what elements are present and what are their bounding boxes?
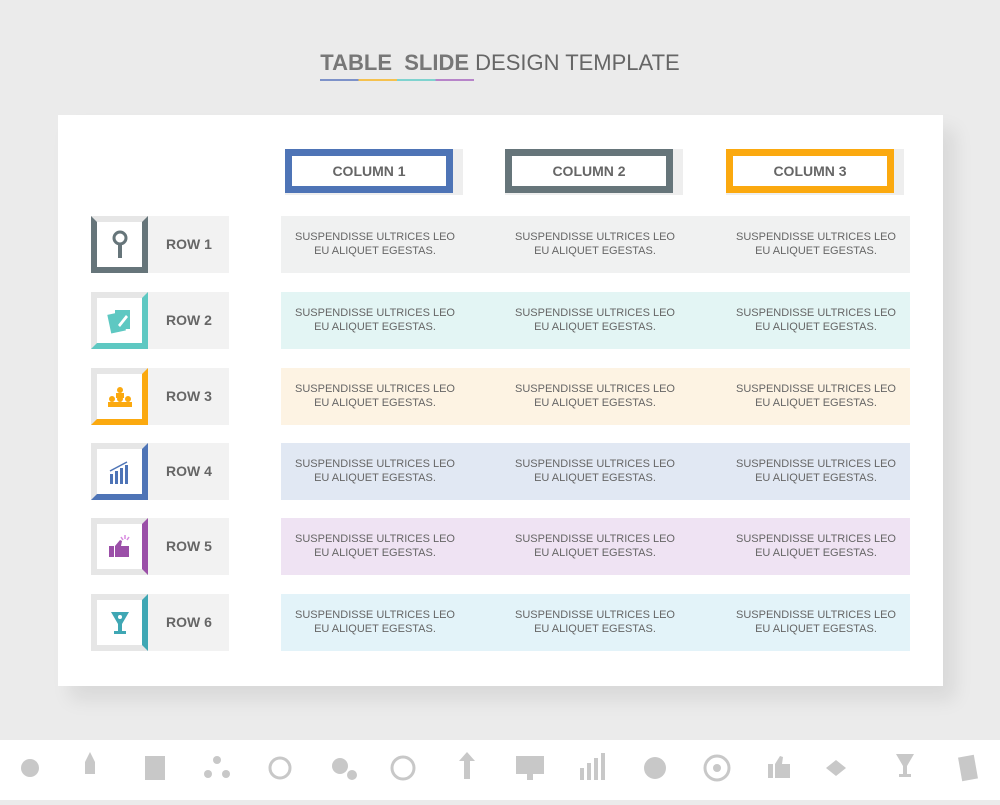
row 4: EU ALIQUET EGESTAS. xyxy=(534,472,656,484)
row 2: SUSPENDISSE ULTRICES LEO xyxy=(515,307,675,319)
row 5 xyxy=(91,518,910,575)
column header 3 xyxy=(726,149,904,195)
column header 2 xyxy=(505,149,683,195)
row 2: ROW 2 xyxy=(166,312,212,328)
column header 3: COLUMN 3 xyxy=(773,163,847,179)
row 5: EU ALIQUET EGESTAS. xyxy=(755,547,877,559)
panel: table xyxy=(58,115,943,686)
row 5: EU ALIQUET EGESTAS. xyxy=(534,547,656,559)
row 3: SUSPENDISSE ULTRICES LEO xyxy=(736,383,896,395)
row 6: EU ALIQUET EGESTAS. xyxy=(755,623,877,635)
row 6 xyxy=(91,594,910,651)
row 5: ROW 5 xyxy=(166,538,212,554)
row 3: EU ALIQUET EGESTAS. xyxy=(755,397,877,409)
row 6: EU ALIQUET EGESTAS. xyxy=(534,623,656,635)
row 4: SUSPENDISSE ULTRICES LEO xyxy=(736,458,896,470)
row 4 xyxy=(91,443,910,500)
row 5: EU ALIQUET EGESTAS. xyxy=(314,547,436,559)
row 1: SUSPENDISSE ULTRICES LEO xyxy=(295,231,455,243)
row 1: SUSPENDISSE ULTRICES LEO xyxy=(515,231,675,243)
row 3: EU ALIQUET EGESTAS. xyxy=(314,397,436,409)
row 1: EU ALIQUET EGESTAS. xyxy=(314,245,436,257)
icon: key xyxy=(91,216,148,273)
row 1 xyxy=(91,216,910,273)
row 2: EU ALIQUET EGESTAS. xyxy=(534,321,656,333)
row 5: SUSPENDISSE ULTRICES LEO xyxy=(295,533,455,545)
row 3: SUSPENDISSE ULTRICES LEO xyxy=(295,383,455,395)
column header 2: COLUMN 2 xyxy=(552,163,626,179)
row 1: SUSPENDISSE ULTRICES LEO xyxy=(736,231,896,243)
row 2: EU ALIQUET EGESTAS. xyxy=(755,321,877,333)
row 6: SUSPENDISSE ULTRICES LEO xyxy=(736,609,896,621)
row 3 xyxy=(91,368,910,425)
row 4: EU ALIQUET EGESTAS. xyxy=(755,472,877,484)
row 1: EU ALIQUET EGESTAS. xyxy=(755,245,877,257)
row 3: ROW 3 xyxy=(166,388,212,404)
icon: notes xyxy=(91,292,148,349)
bottom icon strip xyxy=(0,740,1000,800)
column header 1 xyxy=(285,149,463,195)
row 3: EU ALIQUET EGESTAS. xyxy=(534,397,656,409)
row 5: SUSPENDISSE ULTRICES LEO xyxy=(736,533,896,545)
column header 1: COLUMN 1 xyxy=(332,163,406,179)
row 6: ROW 6 xyxy=(166,614,212,630)
row 4: ROW 4 xyxy=(166,463,212,479)
row 2: EU ALIQUET EGESTAS. xyxy=(314,321,436,333)
row 6: SUSPENDISSE ULTRICES LEO xyxy=(295,609,455,621)
row 1: EU ALIQUET EGESTAS. xyxy=(534,245,656,257)
row 6: EU ALIQUET EGESTAS. xyxy=(314,623,436,635)
icon: trophy xyxy=(91,594,148,651)
icon: team xyxy=(91,368,148,425)
icon: bar chart xyxy=(91,443,148,500)
row 2: SUSPENDISSE ULTRICES LEO xyxy=(295,307,455,319)
title: TABLE SLIDE DESIGN TEMPLATE xyxy=(320,50,680,75)
row 2: SUSPENDISSE ULTRICES LEO xyxy=(736,307,896,319)
row 3: SUSPENDISSE ULTRICES LEO xyxy=(515,383,675,395)
row 5: SUSPENDISSE ULTRICES LEO xyxy=(515,533,675,545)
row 4: SUSPENDISSE ULTRICES LEO xyxy=(515,458,675,470)
row 6: SUSPENDISSE ULTRICES LEO xyxy=(515,609,675,621)
icon: thumbs up xyxy=(91,518,148,575)
row 1: ROW 1 xyxy=(166,236,212,252)
row 4: SUSPENDISSE ULTRICES LEO xyxy=(295,458,455,470)
row 4: EU ALIQUET EGESTAS. xyxy=(314,472,436,484)
row 2 xyxy=(91,292,910,349)
